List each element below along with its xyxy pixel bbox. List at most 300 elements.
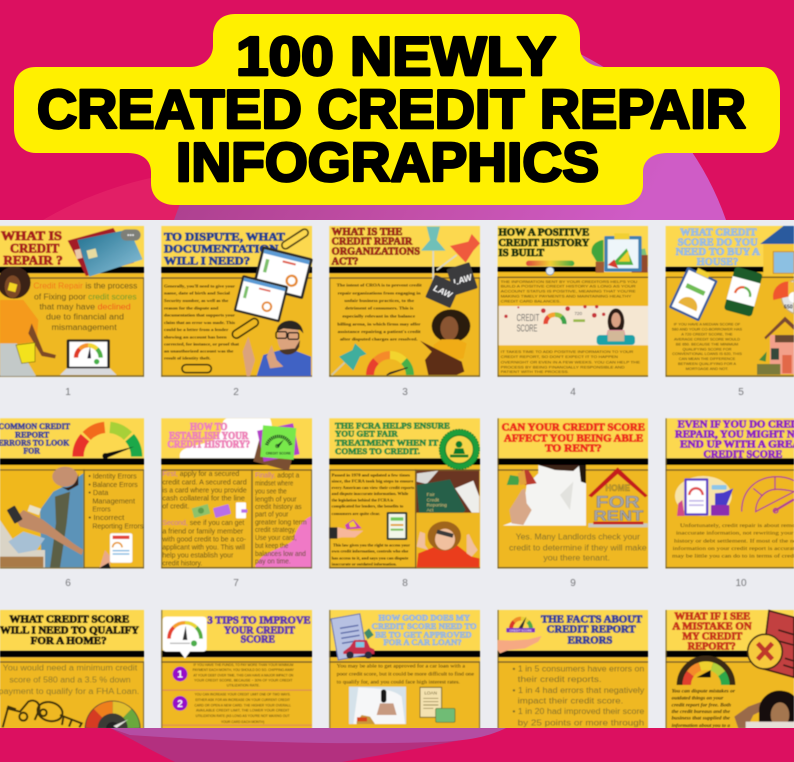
panel: card 10 even if you do credit repair — [666, 418, 794, 568]
tip 2 text: AVAILABLE CREDIT LIMIT, THE LOWER YOUR CREDIT — [196, 709, 290, 713]
text column left: applicant with you. This will — [162, 542, 245, 551]
image: woman touching gauge — [503, 465, 586, 526]
tip 2 text: CARD OR OPEN A NEW CARD. THE HIGHER YOUR OVERALL — [194, 703, 291, 707]
image: credit score woman: 720 — [574, 311, 583, 316]
heading — [676, 228, 760, 268]
icon: pink house — [757, 317, 794, 375]
body text italic — [672, 690, 735, 729]
heading — [372, 614, 477, 647]
body text: BETWEEN QUALIFYING FOR A — [678, 361, 736, 366]
label: page number 5: 5 — [738, 387, 744, 398]
icon: clipboard — [669, 264, 719, 322]
icon: credit cards — [68, 228, 143, 277]
image: credit score woman — [499, 305, 648, 345]
panel: card 14 facts about errors — [498, 610, 648, 729]
heading: A MISTAKE ON — [672, 621, 752, 632]
list text: • Incorrect — [88, 513, 124, 522]
heading: CAN YOUR CREDIT SCORE — [502, 423, 645, 434]
icon: home for rent — [588, 467, 648, 527]
heading: THE FACTS ABOUT — [541, 615, 642, 626]
tip 1 text: IF YOU HAVE THE FUNDS, TO PAY MORE THAN YOUR MINIMUM — [193, 663, 293, 667]
icon: gauge outline — [742, 477, 794, 513]
panel: card 8 FCRA — [329, 418, 480, 568]
body text upper: and dispute inaccurate information. While — [332, 491, 409, 496]
panel: card 3 credit repair organizations act — [329, 226, 480, 377]
heading: ERRORS — [568, 635, 612, 646]
text column right: Use your card, — [255, 535, 297, 542]
text column right: greater long term — [255, 519, 307, 526]
icon: torn report with x — [748, 611, 794, 677]
body text: credit to determine if they will make — [509, 543, 647, 552]
label: page number 6: 6 — [65, 578, 71, 589]
body text: documentation that supports your — [164, 313, 235, 318]
list text: Management — [92, 496, 135, 505]
heading: HOW TO — [190, 422, 228, 433]
icon: credit cards: ••• — [127, 232, 135, 239]
body text: Credit Repair is the process — [33, 282, 137, 291]
body text — [164, 283, 240, 361]
body text italic: business that supplied the — [672, 717, 730, 722]
image: excited woman — [416, 514, 479, 567]
body text top: CREDIT CARD BALANCES. — [501, 298, 561, 303]
heading: CREDIT REPORT — [547, 625, 636, 636]
body text italic: credit report for free. Both — [672, 703, 731, 708]
body text: you there tenant. — [543, 553, 610, 562]
tip 1 text: UTILIZATION RATE. — [227, 684, 260, 688]
heading: HOW A POSITIVE — [498, 228, 589, 239]
icon: gauge speech bubble — [163, 617, 207, 658]
body text top: BUILD A POSITIVE CREDIT HISTORY AS LONG AS YOUR — [501, 284, 636, 289]
body text: poor credit score, but it could be more difficult to find one — [337, 672, 475, 677]
body text: name, date of birth and Social — [164, 290, 231, 295]
icon: phone gauge — [724, 266, 763, 317]
panel: card 15 mistake on report — [666, 610, 794, 729]
body text upper: consumers are quite clear. — [332, 511, 380, 516]
gallery of infographic thumbnails — [0, 226, 794, 729]
heading: WILL I NEED TO QUALIFY — [0, 625, 139, 636]
label: page number 1: 1 — [65, 387, 71, 398]
heading: YOUR CREDIT — [224, 625, 295, 636]
text column right: part of your — [255, 512, 289, 519]
panel: card 7 establish credit history — [161, 418, 312, 568]
body text bottom: IT TAKES TIME TO ADD POSITIVE INFORMATION TO YOUR — [501, 349, 633, 354]
body text: showing an account has been — [164, 334, 227, 339]
body text: Generally, you'll need to give your — [164, 283, 235, 288]
heading: THE FCRA HELPS ENSURE — [335, 420, 450, 430]
body text italic: outdated things on your — [672, 697, 724, 702]
body text italic: You can dispute mistakes or — [672, 690, 735, 695]
text column right: credit history as — [255, 504, 302, 511]
heading — [164, 230, 285, 267]
body text: payment to qualify for a FHA Loan. — [0, 687, 139, 696]
icon: red pushpin — [437, 234, 480, 270]
body text: inaccurate information, not rewriting your credit — [676, 530, 794, 537]
text column left: First, apply for a secured — [162, 469, 239, 478]
heading: IS BUILT — [498, 248, 544, 259]
image: FCRA book — [416, 471, 479, 513]
icon: large gauge — [78, 427, 137, 459]
heading — [335, 420, 450, 456]
text column left: with good credit to be a co- — [161, 534, 247, 543]
heading: WHAT IS — [1, 229, 62, 243]
image: FCRA book: Reporting — [427, 503, 447, 508]
icon: clipboard plant purse — [591, 233, 648, 273]
body text top — [501, 279, 637, 303]
icon: sticky note gauge: CREDIT SCORE — [266, 451, 292, 455]
person: man pointing — [243, 321, 311, 376]
text column left: of credit. — [162, 502, 189, 511]
panel: card 11 credit score for a home — [0, 610, 144, 729]
body text: an unauthorized account was the — [164, 349, 233, 354]
heading: CREDIT HISTORY? — [167, 440, 250, 451]
body text: 580 AND YOUR CO-BORROWER HAS — [672, 326, 742, 331]
heading: FOR A CAR LOAN? — [383, 638, 462, 647]
icon: home for rent: HOME — [605, 483, 630, 493]
text column left: credit card. A secured card — [162, 477, 247, 486]
body text: billing arena, in which firms may offer — [337, 321, 421, 326]
body text: BE 650. BECAUSE THE MINIMUM — [676, 341, 738, 346]
heading: HOUSE? — [697, 257, 738, 268]
text column right — [255, 473, 307, 565]
body text: IF YOU HAVE A MEDIAN SCORE OF — [674, 321, 741, 326]
heading: WHAT IS THE — [332, 227, 402, 238]
list text: impact their credit score. — [518, 697, 623, 706]
list text: Reporting Errors — [92, 521, 144, 530]
body text — [337, 665, 475, 686]
heading: REPORT? — [688, 641, 736, 652]
icon: laptop with gauge — [60, 339, 117, 375]
heading — [502, 423, 645, 455]
body text: CONVENTIONAL LOANS IS 620, THIS — [672, 351, 742, 356]
heading: CREDIT HISTORY — [498, 238, 590, 249]
heading: YOU GET FAIR — [335, 429, 398, 439]
tip number 2: 2 — [177, 699, 183, 710]
gallery panel background — [0, 220, 794, 728]
body text: may be little you can do to in terms of credit repair — [672, 553, 794, 560]
body text: You would need a minimum credit — [3, 664, 138, 673]
title text — [37, 25, 746, 193]
heading: FOR A HOME? — [31, 636, 107, 647]
body text: Yes. Many Landlords check your — [516, 532, 640, 541]
icon: keys outline — [3, 699, 82, 727]
body text: QUALIFYING SCORE FOR — [683, 346, 732, 351]
title banner — [14, 14, 780, 205]
icon: green seal — [439, 429, 479, 469]
person: confused woman — [734, 691, 794, 729]
panel: card 5 score to buy a house — [666, 226, 794, 377]
divider — [162, 725, 312, 726]
heading: ESTABLISH YOUR — [169, 431, 249, 442]
heading: WHAT CREDIT SCORE — [9, 615, 129, 626]
heading: MY CREDIT — [682, 631, 742, 642]
heading — [0, 615, 139, 647]
image: FCRA book: Credit — [427, 497, 440, 502]
heading: 3 TIPS TO IMPROVE — [207, 615, 311, 626]
list text: • Balance Errors — [88, 480, 138, 489]
icon: loan document and car — [331, 614, 374, 660]
body text: corrected, for instance, or proof that — [164, 341, 240, 346]
heading — [498, 228, 590, 259]
heading — [1, 229, 63, 267]
body text: especially relevant in the balance — [342, 314, 415, 319]
heading: CREDIT SCORE NEED TO — [372, 622, 477, 631]
icon: sticky note gauge — [253, 423, 300, 471]
tip 1 text: AT YOUR DEBT OVER TIME, THIS CAN HAVE A MAJOR IMPACT ON — [193, 673, 294, 677]
icon: law books: LAW — [452, 272, 474, 287]
list text — [512, 664, 645, 727]
body text bottom: CREDIT REPORT, SO DON'T EXPECT IT TO HAPPEN — [501, 354, 618, 359]
tip number 2 — [173, 696, 187, 711]
icon: law books: LAW — [432, 283, 454, 300]
body text: history or debt settlement. If most of the negative — [674, 537, 794, 544]
panel: card 12 three tips — [161, 610, 312, 729]
text column right: you see the — [255, 488, 287, 495]
body text lower: This law gives you the right to access your — [333, 543, 410, 548]
body text: AVERAGE CREDIT SCORE WOULD — [674, 336, 740, 341]
body text — [672, 321, 742, 371]
label: page number 10: 10 — [735, 578, 747, 589]
illustration: credit report people — [675, 476, 733, 516]
text column right: Finally, adopt a — [255, 473, 299, 480]
list text: • Identity Errors — [88, 471, 137, 480]
heading: NEED TO BUY A — [676, 247, 760, 258]
label: page number 4: 4 — [570, 387, 576, 398]
text column left: is a card where you provide — [162, 486, 247, 495]
icon: home for rent: FOR — [596, 492, 640, 511]
text column right: mindset where — [255, 481, 293, 488]
label: page number 7: 7 — [233, 578, 239, 589]
panel: card 4 positive credit history — [498, 226, 648, 377]
icon: law books — [425, 262, 478, 308]
body text — [337, 283, 422, 341]
score bar — [526, 261, 574, 275]
heading: CREDIT REPAIR — [332, 237, 413, 248]
tip 2 text: YOUR CARD EACH MONTH) — [221, 720, 264, 724]
heading — [541, 615, 642, 646]
body text: The intent of CROA is to prevent credit — [337, 283, 422, 288]
body text lower: own credit information, controls who else — [332, 549, 409, 554]
heading: TREATMENT WHEN IT — [335, 438, 439, 448]
body text: information on your credit report is accurate, there — [673, 545, 794, 552]
body text — [33, 282, 137, 332]
heading: WILL I NEED? — [164, 253, 250, 267]
body text — [0, 664, 139, 696]
panel: card 6 common credit report errors — [0, 418, 144, 568]
body text upper — [332, 473, 415, 516]
icons: money card phone — [192, 502, 247, 518]
body text: MORTGAGE AND NOT. — [686, 366, 728, 371]
list text: • Data — [88, 488, 109, 497]
heading: SCORE DO YOU — [678, 237, 758, 248]
icon: phone credit report — [99, 533, 132, 568]
heading — [167, 422, 250, 451]
body text: result of identity theft. — [164, 356, 211, 361]
tip 1 text — [193, 663, 295, 688]
label: page number 9: 9 — [570, 578, 576, 589]
body text upper: since, the FCRA took big steps to ensure — [332, 479, 414, 484]
heading: TO DISPUTE, WHAT — [164, 230, 285, 244]
body text: score of 580 and a 3.5 % down — [9, 675, 131, 684]
icon: circular gauge 650 — [773, 280, 794, 313]
icon: gauge — [682, 661, 730, 685]
icon: loan document: LOAN — [424, 691, 437, 696]
image: FCRA book: Act — [427, 508, 434, 513]
icon: paperclip top — [280, 228, 310, 250]
body text bottom: PROCESS BY BEING FINANCIALLY RESPONSIBLE AND — [501, 364, 625, 369]
panel: card 1 what is credit repair — [0, 226, 144, 377]
icon: paperclip middle — [231, 317, 260, 340]
text column right: pay on time. — [255, 558, 291, 565]
body text: Unfortunately, credit repair is about removing — [680, 522, 794, 529]
body text upper: every American can view their credit reports — [332, 485, 415, 490]
list text: • 1 in 20 had improved their score — [512, 707, 645, 716]
label: page number 2: 2 — [233, 387, 239, 398]
body text: due to financial and — [46, 312, 124, 321]
heading: DOCUMENTATION — [164, 242, 279, 256]
icon: gauge — [370, 355, 410, 375]
heading: ORGANIZATIONS — [332, 246, 420, 257]
body text: unfair business practices, to the — [344, 298, 414, 303]
body text: of Fixing poor credit scores — [34, 292, 137, 301]
icon: hand and phone — [329, 512, 407, 540]
heading — [207, 615, 311, 646]
text column right: length of your — [255, 496, 297, 503]
body text: mismanagement — [52, 323, 118, 332]
heading: WHAT CREDIT — [680, 228, 757, 239]
tip 2 text — [194, 693, 291, 724]
text column left: help you establish your — [162, 550, 234, 559]
bottom crimson band — [0, 728, 794, 762]
body text: detriment of consumers. This is — [345, 306, 414, 311]
text column left — [161, 469, 247, 567]
body text bottom — [501, 349, 640, 374]
icon: green card — [436, 708, 455, 722]
title text: INFOGRAPHICS — [176, 131, 599, 193]
panel: card 13 car loan — [329, 610, 480, 729]
icon: circular gauge 650: 650 — [784, 305, 793, 311]
list text: their credit reports. — [518, 675, 602, 684]
tip 2 text: YOU CAN INCREASE YOUR CREDIT LIMIT ONE OF TWO WAYS. — [195, 693, 291, 697]
heading — [0, 421, 70, 455]
list text: by 25 points or more through — [518, 718, 644, 727]
body text: assistance repairing a patient's credit — [338, 329, 421, 334]
body text italic: the credit bureaus and the — [672, 710, 730, 715]
icon: hand — [498, 636, 542, 653]
icon: teal pushpin small — [332, 343, 367, 375]
text column left: a friend or family member — [162, 526, 244, 535]
tip 2 text: UTILIZATION RATE (AS LONG AS YOU'RE NOT MAXING OUT — [196, 714, 290, 718]
heading: TO RENT? — [545, 444, 602, 455]
heading: WHAT IF I SEE — [674, 611, 750, 622]
body text: claim that an error was made. This — [164, 320, 235, 325]
heading — [672, 611, 752, 652]
heading: BE TO GET APPROVED — [375, 630, 472, 639]
body text: repair organizations from engaging in — [338, 290, 421, 295]
title text: CREATED CREDIT REPAIR — [37, 78, 746, 140]
body text: You may be able to get approved for a car loan with a — [337, 665, 466, 670]
tip 1 text: YOUR CREDIT SCORE, BECAUSE ~ 30% OF YOUR CREDIT — [194, 678, 293, 682]
heading: AFFECT YOU BEING ABLE — [504, 434, 643, 445]
list text: • 1 in 4 had errors that negatively — [512, 686, 644, 695]
icon: house top — [760, 226, 794, 276]
text column left: cash collateral for the line — [162, 494, 245, 503]
icon: paperclip bottom — [182, 365, 211, 373]
body text upper: the legislation behind the FCRA is — [332, 497, 394, 502]
body text bottom: PATIENT WITH THE PROCESS. — [501, 369, 569, 374]
text column left: Second, see if you can get — [162, 518, 244, 527]
heading: COMMON CREDIT — [0, 421, 70, 431]
body text: CAN MEAN THE DIFFERENCE — [679, 356, 736, 361]
body text lower — [332, 543, 410, 567]
body text lower: inaccurate or outdated information. — [332, 562, 397, 567]
image: credit score woman: SCORE — [517, 323, 538, 334]
icon: loan document — [420, 687, 442, 717]
body text top: ACCOUNT STATUS IS POSITIVE, MEANING THAT YOU'RE — [501, 288, 636, 293]
tip 2 text: EITHER ASK FOR AN INCREASE ON YOUR CURRENT CREDIT — [195, 698, 291, 702]
heading: CREDIT SCORE — [703, 450, 782, 461]
banner shape — [14, 14, 780, 205]
heading — [332, 227, 420, 267]
heading: FOR — [23, 445, 41, 455]
icon: teal pushpin — [421, 227, 446, 280]
label: page number 8: 8 — [402, 578, 408, 589]
body text italic: information about you to a — [672, 724, 731, 729]
body text: could be a letter from a lender — [164, 327, 228, 332]
tip 1 text: PAYMENT EACH MONTH, YOU SHOULD DO SO. CHIPPING AWAY — [193, 668, 295, 672]
body text lower: has access to it, and says you can dispute — [332, 555, 409, 560]
title text: 100 NEWLY — [236, 25, 556, 87]
person: smiling woman — [420, 309, 470, 375]
heading: CREDIT — [10, 242, 60, 256]
body text: after disputed charges are resolved. — [340, 336, 418, 341]
image: man with phone — [0, 467, 83, 567]
body text — [509, 532, 647, 562]
heading: ACT? — [332, 256, 358, 267]
body text: that may have declined — [39, 302, 131, 311]
icon: credit score logo: CREDIT SCORE — [509, 628, 532, 632]
list text — [88, 471, 144, 530]
text column right: credit strategy. — [255, 527, 296, 534]
list text: Errors — [92, 505, 111, 514]
body text bottom: OVERNIGHT OR EVEN IN A FEW WEEKS. YOU CAN HELP THE — [501, 359, 640, 364]
body text: to qualify for, and you could face high interest rates. — [337, 681, 460, 686]
panel: card 9 renting — [498, 418, 648, 568]
image: signing contract — [349, 687, 406, 724]
body text top: MAKING TIMELY PAYMENTS AND MAINTAINING HEALTHY — [501, 293, 632, 298]
heading: REPORT — [15, 429, 50, 439]
body text — [672, 522, 794, 560]
body text upper: complicated for lenders, the benefits to — [332, 504, 403, 509]
body text upper: Passed in 1970 and updated a few times — [332, 473, 411, 478]
body text: Security number, as well as the — [164, 298, 228, 303]
icon: credit score logo — [506, 617, 535, 632]
icon: speedometer — [85, 701, 141, 729]
heading: COMES TO CREDIT. — [335, 446, 420, 456]
body text: reason for the dispute and — [164, 305, 219, 310]
text column right: balances low and — [255, 551, 306, 558]
body text top: THE INFORMATION SENT BY YOUR CREDITORS HELPS YOU — [501, 279, 637, 284]
image: credit score woman: CREDIT — [517, 313, 539, 324]
text column right: but keep the — [255, 543, 288, 550]
text column left: credit history. — [162, 558, 202, 567]
tip number 1 — [173, 667, 187, 681]
heading: REPAIR ? — [3, 253, 63, 267]
image: FCRA book: Fair — [427, 492, 435, 497]
heading — [675, 419, 794, 461]
body text: A 720 CREDIT SCORE, THE — [681, 331, 733, 336]
heading: HOW GOOD DOES MY — [378, 614, 470, 623]
tip number 1: 1 — [177, 670, 183, 681]
